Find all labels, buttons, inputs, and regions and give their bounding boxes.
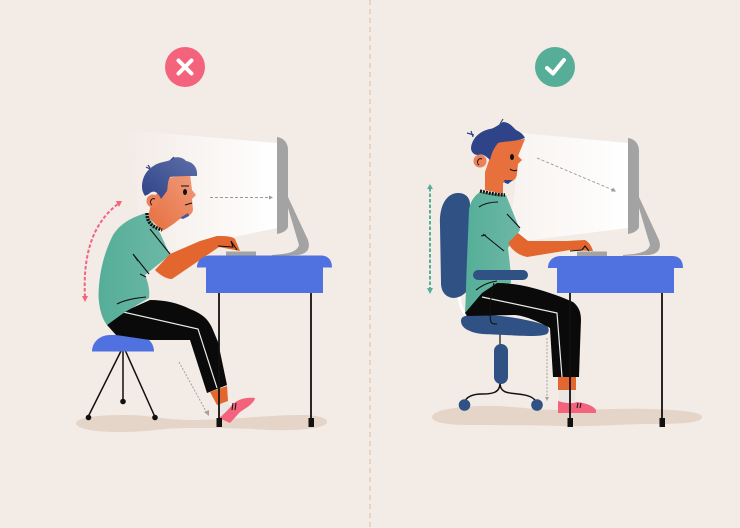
icon: red cross badge xyxy=(165,47,205,87)
panel: bad posture xyxy=(76,47,332,432)
goatee xyxy=(180,213,189,219)
arm xyxy=(155,236,240,279)
arrow: straight back xyxy=(427,184,433,294)
arrow: gaze xyxy=(210,196,273,200)
arrow: foot angle xyxy=(179,362,209,416)
hair xyxy=(471,122,525,160)
keyboard xyxy=(577,252,607,256)
goatee xyxy=(504,180,513,184)
collar xyxy=(480,191,505,195)
arm xyxy=(508,233,593,257)
chair xyxy=(440,193,549,411)
ear xyxy=(474,154,486,168)
arrow: curved spine xyxy=(82,201,122,302)
armrest xyxy=(473,270,528,324)
fingers xyxy=(570,246,589,251)
ear xyxy=(146,194,160,208)
trousers xyxy=(107,300,227,393)
foot and sock xyxy=(558,377,596,413)
hair tufts xyxy=(146,157,174,169)
panel: good posture xyxy=(427,47,702,427)
desk xyxy=(548,256,683,427)
eye and smile xyxy=(510,154,517,171)
shirt creases xyxy=(117,229,170,304)
torso xyxy=(98,213,170,325)
neck and face xyxy=(485,139,525,194)
chair back link xyxy=(459,296,467,316)
collar xyxy=(147,213,162,230)
arrow: foot height xyxy=(545,338,549,401)
figure: upright person xyxy=(465,119,596,413)
shirt creases xyxy=(479,202,520,251)
monitor xyxy=(623,138,660,256)
desk xyxy=(197,256,332,427)
chair seat xyxy=(461,315,549,336)
chair backrest xyxy=(440,193,470,298)
chair base xyxy=(464,383,537,403)
hair xyxy=(142,157,197,199)
trouser stripe xyxy=(482,297,562,377)
arrow: gaze xyxy=(537,158,616,192)
floor shadow xyxy=(432,406,702,426)
centre dashed divider xyxy=(369,0,371,528)
torso xyxy=(465,192,520,313)
screen light beam xyxy=(508,133,628,243)
foot and sock xyxy=(210,386,255,423)
icon: green check badge xyxy=(535,47,575,87)
stool xyxy=(86,335,158,420)
floor shadow xyxy=(76,415,327,432)
trousers xyxy=(465,283,581,377)
eye, brow and mouth xyxy=(181,186,192,205)
figure: slouching person xyxy=(98,157,255,423)
monitor xyxy=(272,137,309,256)
fingers xyxy=(218,241,237,250)
neck and face xyxy=(148,174,196,231)
keyboard xyxy=(226,252,256,256)
chair wheels xyxy=(459,399,543,411)
hair tufts xyxy=(467,119,503,137)
chair post xyxy=(494,334,508,384)
screen light beam xyxy=(125,130,277,256)
